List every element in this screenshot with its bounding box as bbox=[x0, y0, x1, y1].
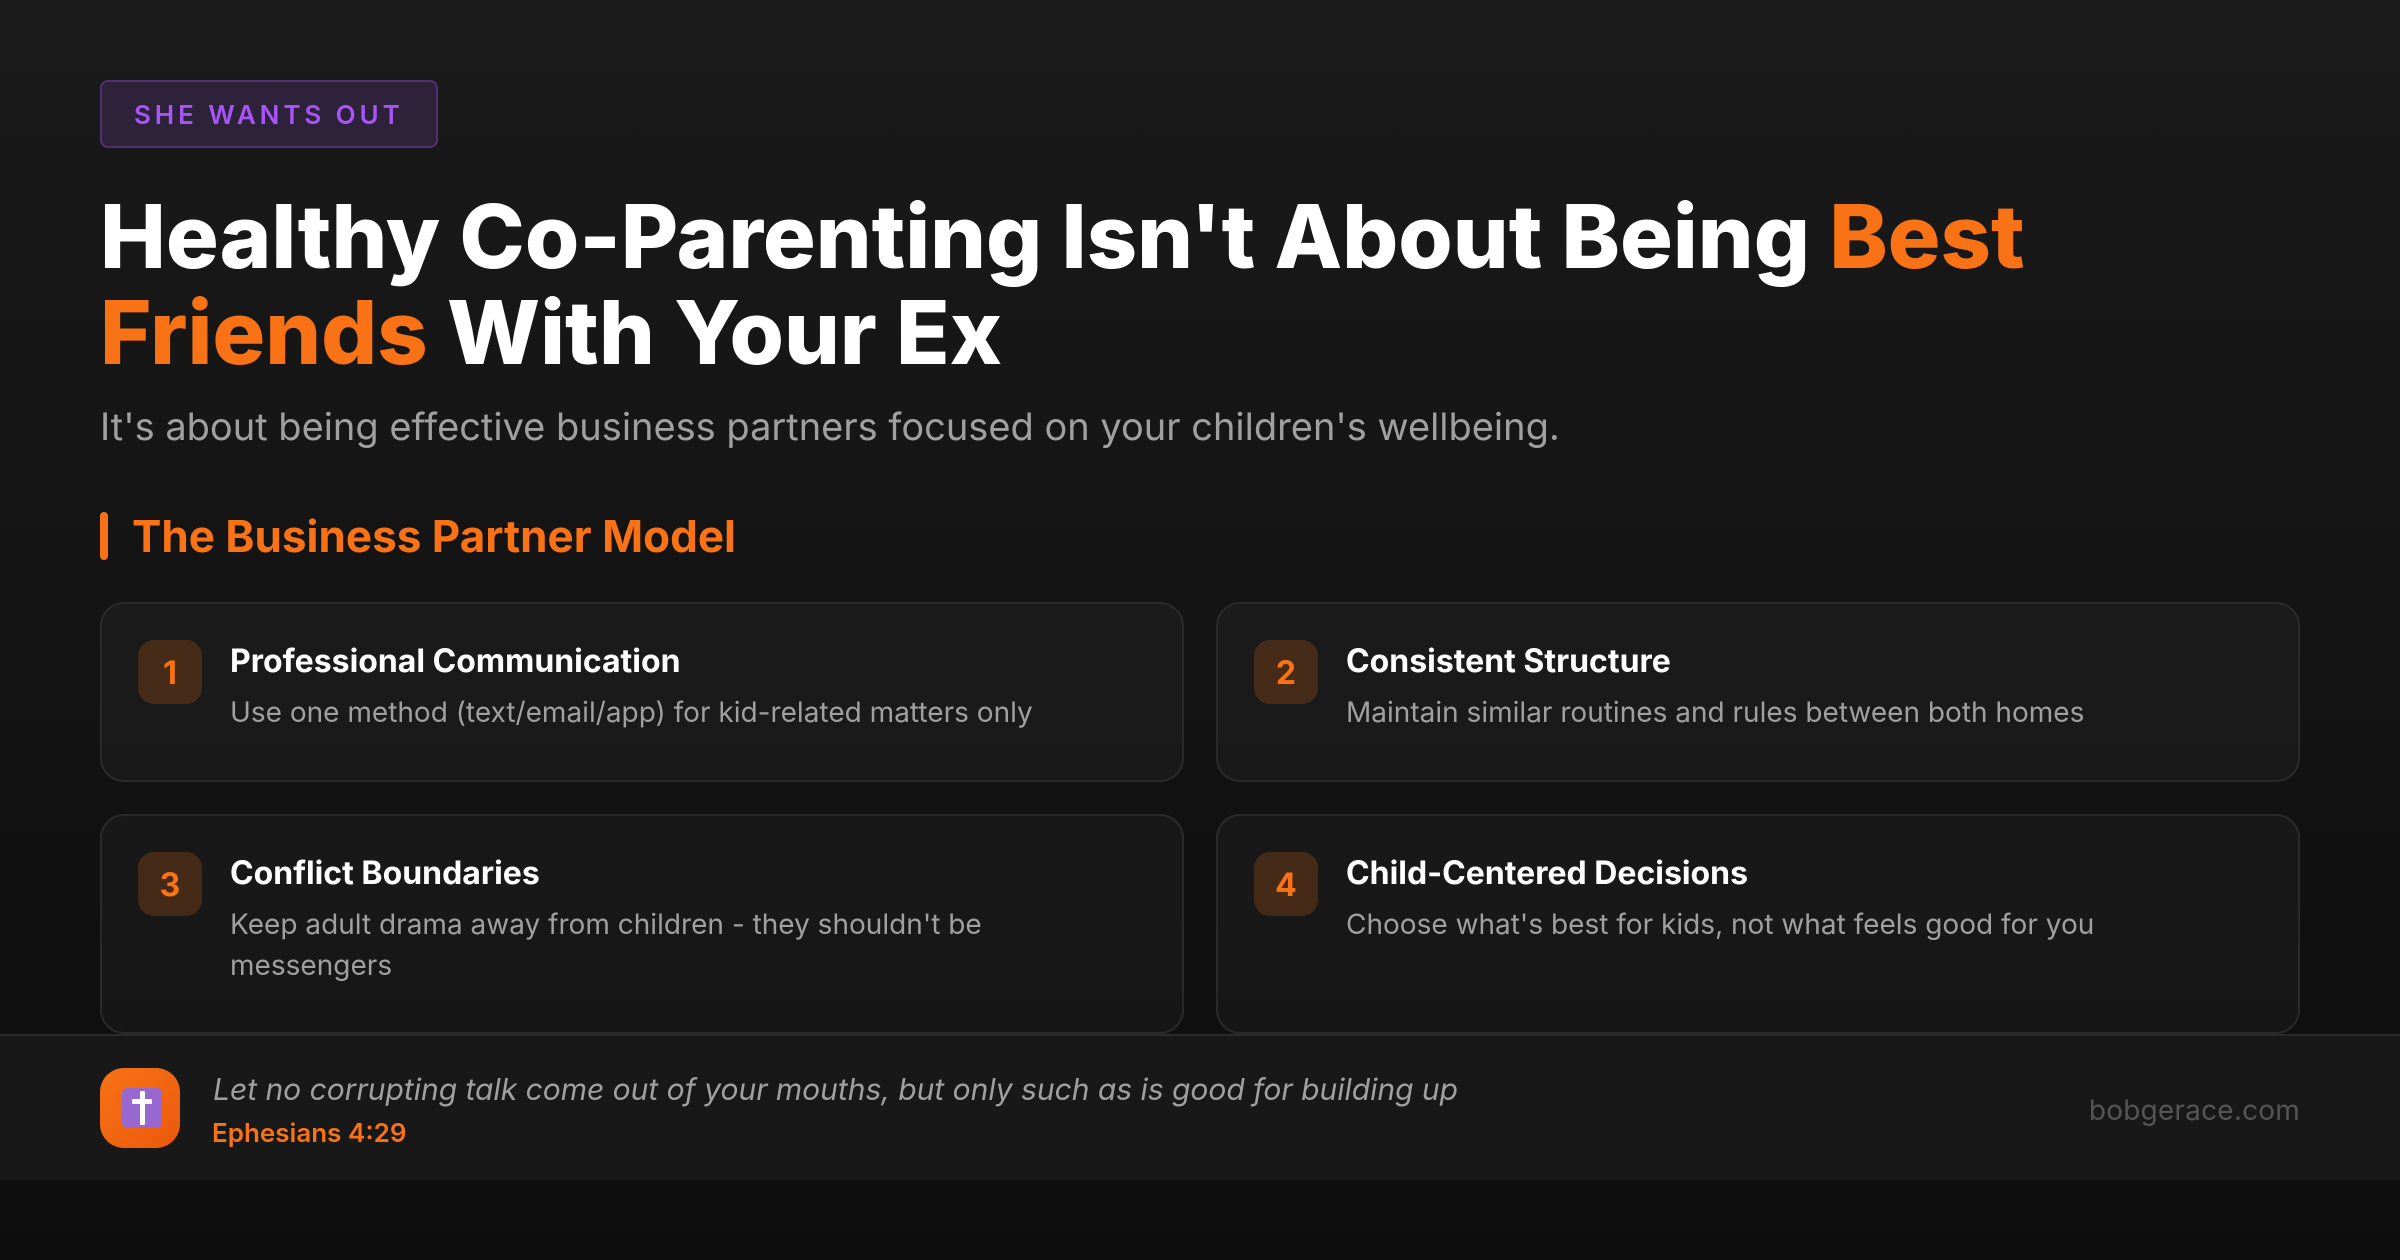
number badge 3: 3 bbox=[160, 865, 180, 904]
icon: cross tile bbox=[100, 1068, 180, 1148]
title: Healthy Co-Parenting Isn't About Being Best Friends With Your Ex bbox=[100, 184, 2025, 386]
heading text: The Business Partner Model bbox=[132, 509, 736, 563]
number badge 2 bbox=[1254, 640, 1318, 704]
scripture reference: Ephesians 4:29 bbox=[212, 1118, 406, 1148]
panel: footer bbox=[0, 1034, 2400, 1180]
panel: card 4 Child-Centered Decisions bbox=[1216, 814, 2300, 1034]
card 3 title: Conflict Boundaries bbox=[230, 852, 540, 892]
card 4 description: Choose what's best for kids, not what feels good for you bbox=[1346, 907, 2094, 941]
number badge 1: 1 bbox=[163, 653, 177, 692]
heading accent bar bbox=[100, 512, 108, 560]
panel: card 3 Conflict Boundaries bbox=[100, 814, 1184, 1034]
card 2 title: Consistent Structure bbox=[1346, 640, 1671, 680]
number badge 1 bbox=[138, 640, 202, 704]
website url: bobgerace.com bbox=[2089, 1093, 2300, 1127]
badge: She Wants Out: SHE WANTS OUT bbox=[134, 100, 404, 131]
number badge 4: 4 bbox=[1275, 865, 1297, 904]
number badge 3 bbox=[138, 852, 202, 916]
card 1 description: Use one method (text/email/app) for kid-related matters only bbox=[230, 695, 1033, 729]
panel: card 1 Professional Communication bbox=[100, 602, 1184, 782]
badge: She Wants Out bbox=[100, 80, 438, 148]
number badge 2: 2 bbox=[1276, 653, 1296, 692]
panel: card 2 Consistent Structure bbox=[1216, 602, 2300, 782]
section heading: The Business Partner Model bbox=[100, 509, 736, 563]
icon: purple cross square bbox=[122, 1088, 162, 1128]
subtitle: It's about being effective business partners focused on your children's wellbeing. bbox=[100, 404, 1560, 450]
card 4 title: Child-Centered Decisions bbox=[1346, 852, 1748, 892]
scripture quote: Let no corrupting talk come out of your mouths, but only such as is good for building up bbox=[213, 1072, 1458, 1108]
number badge 4 bbox=[1254, 852, 1318, 916]
card 2 description: Maintain similar routines and rules between both homes bbox=[1346, 695, 2084, 729]
card 3 description: Keep adult drama away from children - they shouldn't be messengers bbox=[230, 907, 982, 982]
card 1 title: Professional Communication bbox=[230, 640, 680, 680]
